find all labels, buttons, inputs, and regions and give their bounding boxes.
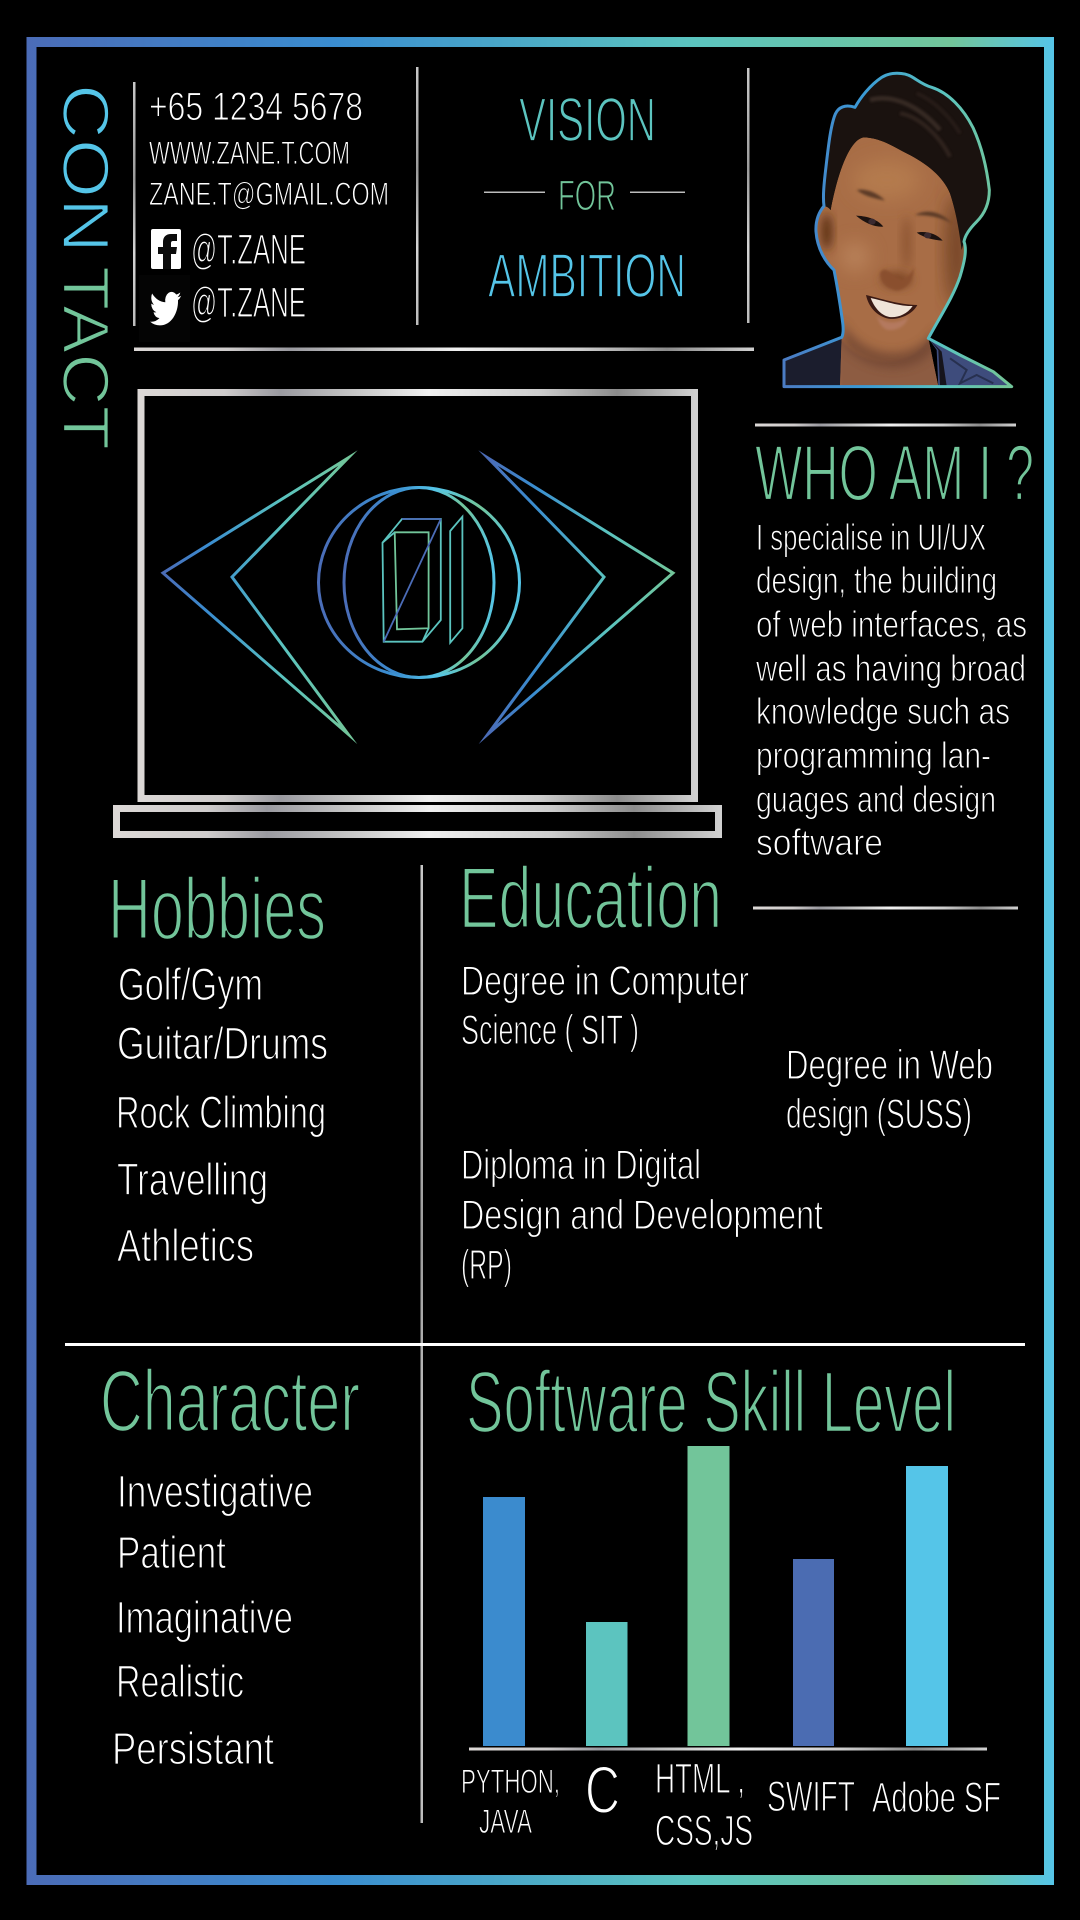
character list: Persistant — [112, 1723, 274, 1774]
education panel — [459, 850, 1018, 1288]
bar: c — [586, 1622, 628, 1746]
character list: Realistic — [116, 1656, 244, 1707]
lower lip — [877, 315, 908, 330]
diploma: (RP) — [461, 1241, 512, 1288]
center vertical divider — [420, 865, 423, 1823]
eyes — [856, 216, 883, 227]
who am i paragraph: programming lan- — [756, 735, 991, 776]
contact vertical heading: TACT — [49, 266, 123, 450]
who am i paragraph: guages and design — [756, 779, 996, 820]
left eye wing — [163, 458, 348, 734]
icon: twitter — [139, 275, 190, 342]
phone number: +65 1234 5678 — [149, 85, 363, 129]
bar: python java — [483, 1497, 525, 1746]
divider rule: contact left — [133, 82, 136, 326]
who am i paragraph: software — [756, 822, 883, 863]
right eye wing — [488, 458, 673, 734]
who am i paragraph: knowledge such as — [756, 691, 1010, 732]
skin — [816, 137, 965, 387]
hobbies list: Athletics — [117, 1220, 254, 1271]
mouth — [866, 295, 917, 319]
character list: Investigative — [117, 1466, 313, 1517]
degree web design: design (SUSS) — [786, 1090, 972, 1137]
vision word: VISION — [519, 86, 656, 155]
rule beside education — [753, 906, 1018, 910]
iris outer ring — [318, 488, 520, 678]
degree web design — [786, 1041, 993, 1137]
iris inner ring — [344, 488, 494, 678]
neck — [840, 340, 938, 385]
rule above heading — [755, 424, 1016, 426]
contact vertical heading — [49, 84, 123, 450]
website: WWW.ZANE.T.COM — [149, 135, 350, 171]
axis labels: HTML , — [655, 1755, 745, 1803]
twitter handle: @T.ZANE — [191, 279, 306, 327]
who am i paragraph: design, the building — [756, 560, 997, 601]
horizontal divider — [65, 1343, 1025, 1346]
chart axis — [469, 1748, 987, 1750]
education heading: Education — [459, 850, 722, 947]
hobbies list: Travelling — [117, 1154, 268, 1205]
contact vertical heading: CON — [49, 84, 123, 253]
degree computer science: Science ( SIT ) — [461, 1006, 639, 1053]
hair — [823, 73, 989, 250]
axis labels: Adobe SF — [872, 1774, 1001, 1822]
axis labels: JAVA — [479, 1803, 532, 1841]
character panel — [100, 1353, 360, 1774]
divider rule: under header — [134, 348, 754, 351]
skin shading — [821, 160, 967, 387]
contact details — [139, 85, 389, 342]
vision for ambition title — [484, 86, 686, 311]
divider rule: vision right — [747, 68, 750, 323]
diploma — [461, 1141, 823, 1288]
nose — [880, 267, 914, 291]
teeth — [871, 298, 913, 317]
diploma: Diploma in Digital — [461, 1141, 701, 1188]
bar: html css js — [688, 1446, 730, 1746]
portrait photo with gradient outline — [784, 73, 1012, 387]
eye graphic — [163, 458, 673, 734]
software skill level panel — [461, 1354, 1001, 1855]
email: ZANE.T@GMAIL.COM — [149, 176, 389, 212]
who am i paragraph — [755, 517, 1027, 863]
bar: swift — [793, 1559, 834, 1746]
shirt right — [928, 338, 1012, 387]
axis labels: CSS,JS — [655, 1807, 753, 1855]
hobbies list — [116, 959, 328, 1271]
facebook handle: @T.ZANE — [191, 226, 306, 274]
character list: Patient — [117, 1527, 226, 1578]
shirt left — [784, 337, 842, 387]
degree computer science: Degree in Computer — [461, 957, 749, 1004]
character list — [112, 1466, 313, 1774]
hobbies list: Guitar/Drums — [117, 1018, 328, 1069]
bar chart — [461, 1446, 1001, 1855]
character list: Imaginative — [116, 1592, 293, 1643]
diploma: Design and Development — [461, 1191, 823, 1238]
axis labels — [461, 1753, 1001, 1855]
for word with side rules: FOR — [558, 172, 616, 220]
hobbies list: Golf/Gym — [118, 959, 263, 1010]
slab — [450, 517, 462, 643]
who am i paragraph: I specialise in UI/UX — [756, 517, 986, 558]
ambition word: AMBITION — [488, 242, 686, 311]
axis labels: SWIFT — [767, 1773, 855, 1821]
who am i panel — [755, 424, 1034, 863]
hobbies panel — [108, 861, 328, 1271]
axis labels: C — [585, 1753, 620, 1828]
cuboid — [382, 519, 441, 642]
icon: facebook — [151, 229, 181, 269]
bar: adobe — [906, 1466, 948, 1746]
gradient outline — [784, 73, 1012, 387]
monitor illustration — [116, 392, 718, 834]
hobbies heading: Hobbies — [108, 861, 326, 958]
character heading: Character — [100, 1353, 360, 1450]
eyebrows — [857, 190, 885, 201]
degree computer science — [461, 957, 749, 1053]
hobbies list: Rock Climbing — [116, 1087, 326, 1138]
degree web design: Degree in Web — [786, 1041, 993, 1088]
axis labels: PYTHON, — [461, 1763, 560, 1801]
divider rule: contact right — [416, 67, 418, 325]
monitor screen frame — [141, 392, 694, 798]
monitor base — [116, 808, 718, 834]
